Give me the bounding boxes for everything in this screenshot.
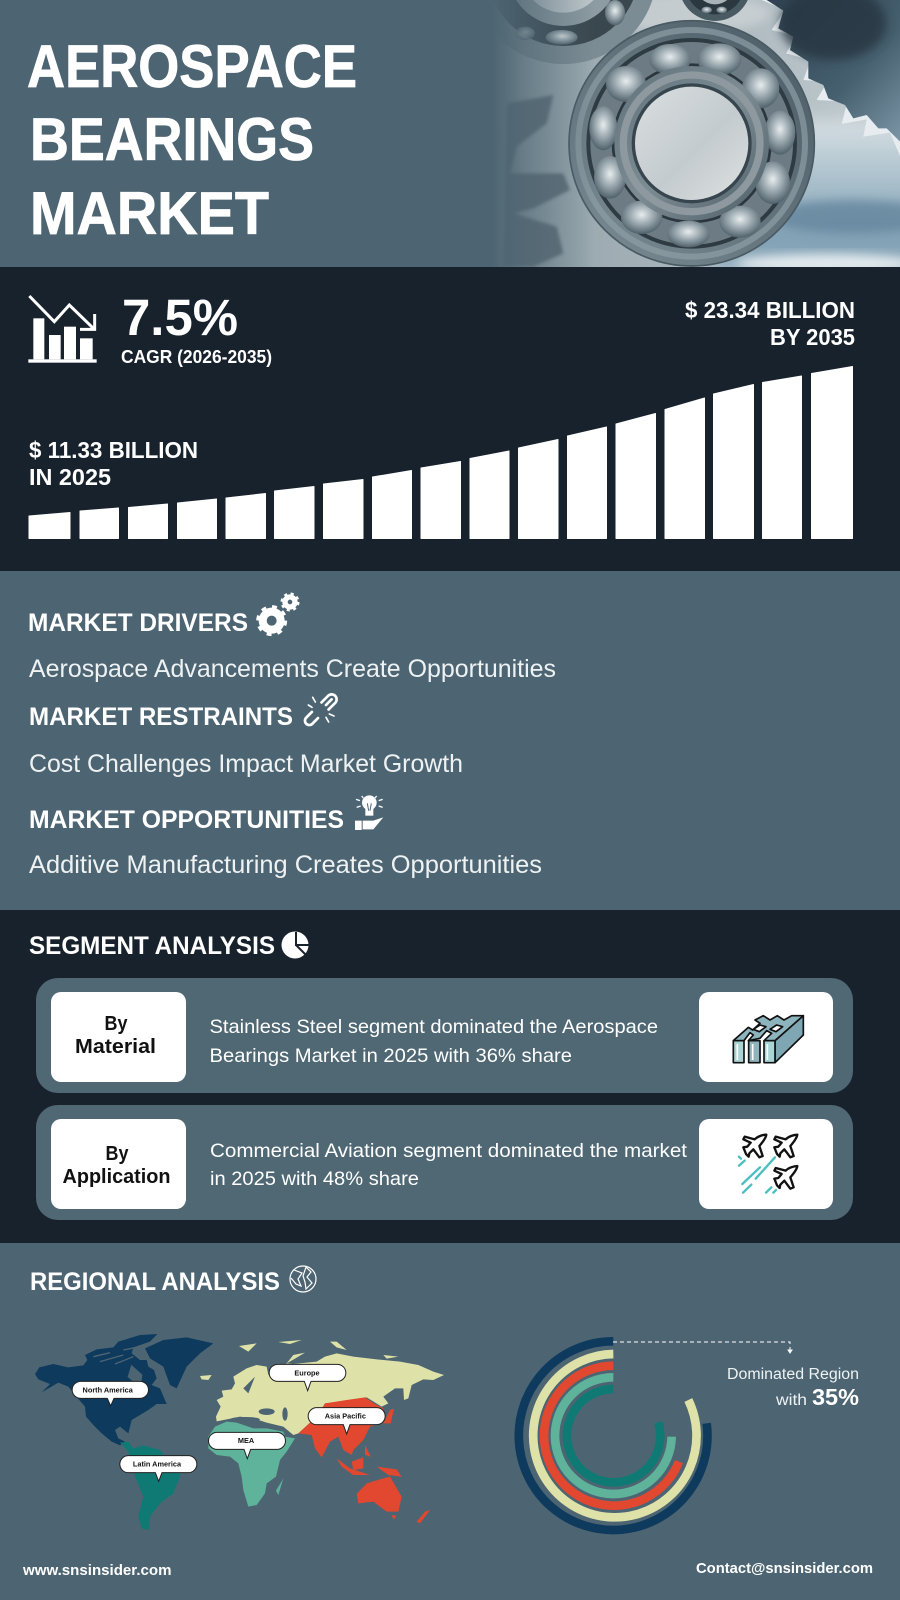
region: Europe bbox=[216, 1340, 444, 1435]
panel: market size bbox=[0, 267, 900, 571]
callout: Latin America: Latin America bbox=[133, 1460, 182, 1469]
callout: Europe bbox=[269, 1364, 346, 1391]
region: Asia Pacific bbox=[298, 1397, 430, 1523]
callout: dominated region: 35% bbox=[812, 1384, 859, 1410]
heading: market restraints: MARKET RESTRAINTS bbox=[29, 703, 293, 731]
icon: lightbulb in hand bbox=[355, 795, 383, 830]
icon: declining chart bbox=[28, 296, 97, 363]
footer: website: www.snsinsider.com bbox=[22, 1562, 172, 1579]
callout: North America bbox=[72, 1381, 148, 1406]
callout: dominated region: with bbox=[775, 1392, 807, 1409]
bar chart: growth 2025 to 2035 bbox=[29, 366, 852, 538]
2035 market value: $ 23.34 BILLION bbox=[685, 297, 855, 323]
text: driver: Aerospace Advancements Create Opportunities bbox=[29, 655, 556, 683]
text: application finding: in 2025 with 48% share bbox=[210, 1168, 419, 1190]
region: Latin America bbox=[120, 1442, 181, 1530]
label card: by material: Material bbox=[75, 1036, 156, 1058]
panel: market dynamics bbox=[0, 571, 900, 910]
callout: MEA bbox=[208, 1432, 285, 1459]
callout: dominated region bbox=[727, 1366, 859, 1410]
CAGR value: 7.5% bbox=[122, 289, 238, 346]
callout: Asia Pacific: Asia Pacific bbox=[325, 1412, 366, 1421]
2035 market value: BY 2035 bbox=[770, 324, 855, 350]
heading: segment analysis: SEGMENT ANALYSIS bbox=[29, 932, 275, 960]
callout: MEA: MEA bbox=[238, 1436, 255, 1445]
icon: broken link bbox=[303, 692, 339, 727]
panel: header bbox=[0, 0, 900, 293]
icon card: steel beams bbox=[699, 992, 833, 1082]
callout: Asia Pacific bbox=[308, 1408, 385, 1434]
inland seas bbox=[230, 1377, 288, 1422]
text: application finding bbox=[210, 1140, 688, 1190]
label card: by application: By bbox=[106, 1143, 129, 1165]
header photo: ball bearings and gear bbox=[450, 0, 900, 293]
label card: by application: Application bbox=[62, 1166, 170, 1188]
2025 market value: $ 11.33 BILLION bbox=[29, 437, 198, 463]
label card: by material: By bbox=[104, 1013, 128, 1035]
title: AEROSPACE bbox=[27, 33, 357, 100]
icon card: aircraft bbox=[699, 1119, 833, 1209]
callout: Europe: Europe bbox=[294, 1369, 320, 1378]
label card: by material bbox=[51, 992, 186, 1082]
title bbox=[27, 33, 357, 247]
footer: contact: Contact@snsinsider.com bbox=[696, 1560, 873, 1577]
text: material finding: Stainless Steel segment dominated the Aerospace bbox=[210, 1016, 658, 1038]
title: BEARINGS bbox=[30, 106, 314, 173]
icon: globe bbox=[290, 1266, 316, 1292]
world map bbox=[35, 1334, 444, 1530]
row: by material bbox=[36, 978, 853, 1093]
text: material finding bbox=[210, 1016, 658, 1067]
CAGR label: CAGR (2026-2035) bbox=[121, 347, 272, 367]
panel: regional analysis bbox=[0, 1243, 900, 1600]
icon: pie chart bbox=[282, 932, 309, 958]
panel: segment analysis bbox=[0, 910, 900, 1243]
title: MARKET bbox=[30, 180, 269, 247]
2025 market value bbox=[29, 437, 198, 490]
text: opportunity: Additive Manufacturing Creates Opportunities bbox=[29, 851, 542, 879]
region: MEA bbox=[208, 1422, 295, 1507]
region: North America bbox=[35, 1334, 213, 1445]
2035 market value bbox=[685, 297, 855, 350]
radial chart: regional share bbox=[519, 1341, 707, 1530]
callout: North America: North America bbox=[83, 1385, 134, 1394]
callout: dominated region: Dominated Region bbox=[727, 1366, 859, 1383]
dashed leader arrow bbox=[613, 1342, 792, 1353]
text: restraint: Cost Challenges Impact Market Growth bbox=[29, 750, 463, 778]
heading: market drivers: MARKET DRIVERS bbox=[28, 609, 248, 637]
heading: market opportunities: MARKET OPPORTUNITIES bbox=[29, 806, 344, 834]
callout: Latin America bbox=[120, 1456, 197, 1481]
icon: gears bbox=[258, 594, 298, 634]
heading: regional analysis: REGIONAL ANALYSIS bbox=[30, 1268, 280, 1296]
2025 market value: IN 2025 bbox=[29, 464, 111, 490]
row: by application bbox=[36, 1105, 853, 1220]
text: material finding: Bearings Market in 2025 with 36% share bbox=[210, 1045, 572, 1067]
label card: by application bbox=[51, 1119, 186, 1209]
text: application finding: Commercial Aviation segment dominated the market bbox=[210, 1140, 688, 1162]
